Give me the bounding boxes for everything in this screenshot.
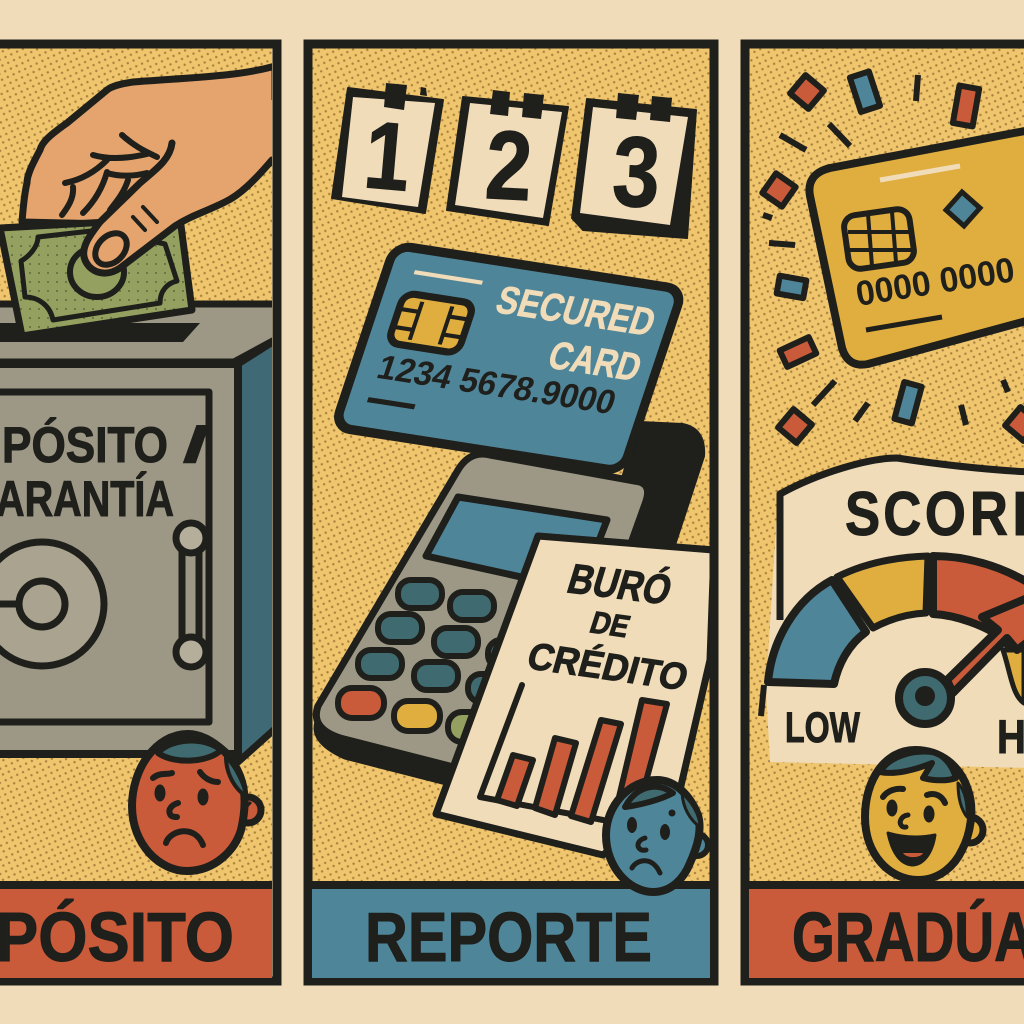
calendar 2: 2 (483, 111, 535, 222)
icon: secured card: 1234 5678.9000 (372, 349, 621, 422)
icon: secured card (334, 245, 683, 472)
safe label: / (183, 417, 209, 473)
gauge arc segments (768, 556, 1024, 703)
caption: reporte: REPORTE (365, 898, 652, 976)
icon: dial (0, 542, 104, 666)
score gauge (761, 458, 1024, 768)
panel frame: gradúa (745, 44, 1024, 981)
panel frame: depósito (0, 44, 277, 981)
confetti (762, 71, 1024, 443)
icon: card chip (843, 208, 915, 270)
icon: gold card (809, 130, 1024, 365)
calendar 3 (572, 93, 696, 238)
bureau report sheet: CRÉDITO (523, 634, 693, 699)
icon: card chip (388, 293, 474, 354)
caption: reporte (312, 881, 710, 978)
calendar 3: 3 (610, 115, 663, 229)
icon: safe handle (176, 523, 206, 667)
icon: gold card: 0000 0000 (853, 250, 1017, 314)
calendar 1 (332, 83, 443, 213)
chart: bars (480, 685, 667, 840)
panel frame: reporte (308, 44, 714, 981)
calendar 1: 1 (360, 100, 415, 211)
score gauge: LOW (785, 704, 860, 752)
icon: secured card: SECURED (491, 278, 661, 345)
caption: gradúa (749, 881, 1024, 978)
icon: happy face (865, 750, 983, 880)
icon: calendar pages (332, 83, 696, 238)
icon: banknote (0, 218, 192, 336)
safe label (0, 417, 206, 516)
icon: sad face (blue) (606, 780, 708, 892)
icon: secured card: CARD (543, 333, 647, 390)
calendar 2 (447, 90, 568, 225)
safe label: ARANTÍA (0, 471, 174, 527)
icon: hand (0, 66, 275, 336)
bureau report sheet (436, 536, 714, 855)
icon: safe box (0, 304, 282, 762)
icon: sad face (orange) (132, 734, 261, 871)
bureau report sheet: BURÓ (562, 554, 678, 613)
gauge needle (899, 597, 1024, 724)
icon: card terminal (316, 424, 702, 806)
safe label: PÓSITO (2, 417, 168, 473)
caption: depósito: PÓSITO (0, 898, 234, 976)
panel: gradúa (749, 48, 1024, 888)
panel: reporte (312, 48, 714, 888)
bureau report sheet: DE (586, 605, 634, 644)
panel: depósito (0, 48, 282, 888)
